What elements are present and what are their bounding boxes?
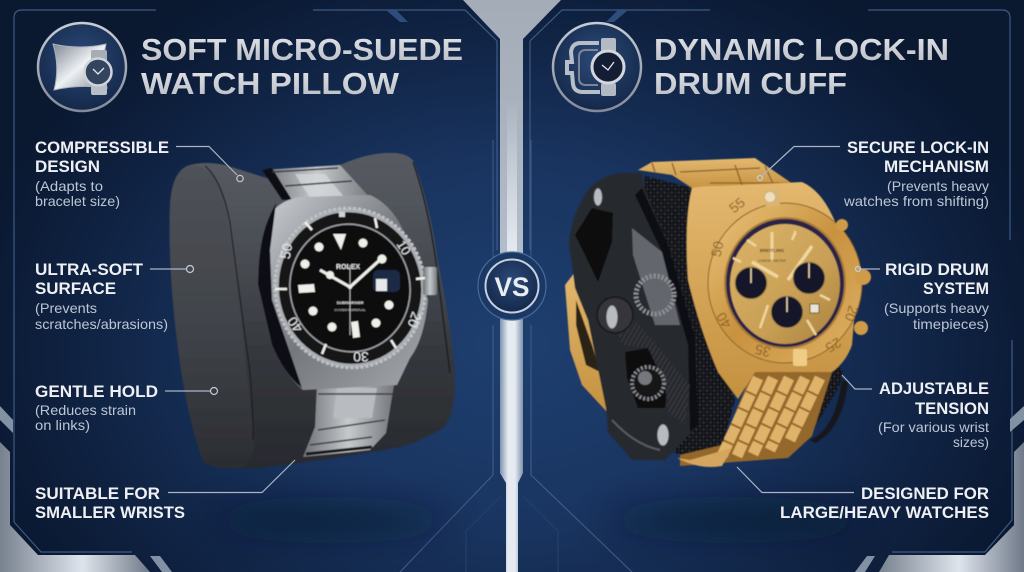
callout: ultra-soft surface: (Prevents [35,300,97,316]
gold watch text [708,194,862,361]
pillow cushion [170,153,455,468]
icon: pillow and watch badge [38,23,126,111]
callout: compressible design: DESIGN [35,157,100,176]
drum cuff with gold watch [565,158,871,467]
VS badge [478,252,546,320]
callout: adjustable tension: sizes) [953,434,989,450]
steel case [258,195,428,390]
mechanism gears [597,276,674,399]
gold watch text: 55 [726,194,748,216]
callout: adjustable tension: (For various wrist [878,419,989,435]
dial and bezel text: OYSTER PERPETUAL [334,308,366,312]
floor shadow right [605,508,865,532]
gold watch text: CHRONOMETER [758,259,786,263]
callout: ultra-soft surface: ULTRA-SOFT [35,260,144,279]
bezel and dial [260,194,440,382]
callout: gentle hold: GENTLE HOLD [35,382,158,401]
heading: soft micro-suede watch pillow [141,32,463,101]
callout: rigid drum system: SYSTEM [923,279,989,298]
callout: ultra-soft surface: SURFACE [35,279,116,298]
case shadow [258,203,302,388]
mechanism screws [594,188,669,446]
subdials [735,262,825,328]
gold watch text: 20 [842,304,862,324]
dial and bezel text: SUBMARINER [336,300,364,305]
corner metal: bottom right [855,406,1024,572]
dial and bezel text: ROLEX [336,264,360,271]
gold watch text: BREITLING [760,248,785,253]
black mechanism plate [569,173,698,460]
callout: adjustable tension [842,375,989,450]
callout: designed for large/heavy watches [737,467,989,522]
heading: dynamic lock-in drum cuff: DRUM CUFF [654,66,847,101]
suede pillow with steel watch [170,153,455,468]
lower steel bracelet [303,385,394,457]
heading: soft micro-suede watch pillow: SOFT MICRO-SUEDE [141,32,463,67]
callout: rigid drum system [856,260,989,332]
callout: ultra-soft surface: scratches/abrasions) [35,316,168,332]
gold pushers and crown [836,219,871,335]
callout: adjustable tension: TENSION [915,399,989,418]
corner metal: bottom left [0,406,172,572]
dial and bezel text: 30 [353,349,369,365]
callout: designed for large/heavy watches: LARGE/HEAVY WATCHES [780,503,989,522]
dial and bezel text: 10 [394,238,414,258]
gold dial hands and hour markers [733,231,830,335]
callout: compressible design: (Adapts to [35,178,103,194]
heading: dynamic lock-in drum cuff [654,32,949,101]
callout: rigid drum system: timepieces) [913,316,989,332]
callout: compressible design: COMPRESSIBLE [35,138,169,157]
gold watch text: 25 [823,335,844,356]
center metallic spine [463,0,561,572]
subdial hands [751,263,809,312]
floor shadow left [210,508,450,532]
gold bezel and dial [708,190,862,366]
callout: gentle hold: on links) [35,417,90,433]
left panel frame [14,10,500,572]
callout: designed for large/heavy watches: DESIGNED FOR [861,484,989,503]
callout: gentle hold [35,382,218,433]
callout: rigid drum system: (Supports heavy [884,300,989,316]
carbon drum [640,176,848,456]
icon: drum cuff and watch badge [553,23,641,111]
dial and bezel text: 20 [404,310,425,330]
gold watch text: 35 [753,341,772,361]
date window [373,270,400,292]
dial markers [275,211,425,354]
callout: gentle hold: (Reduces strain [35,402,136,418]
date window gold [810,304,819,313]
heading: dynamic lock-in drum cuff: DYNAMIC LOCK-IN [654,32,949,67]
heading: soft micro-suede watch pillow: WATCH PILLOW [141,66,400,101]
callout: suitable for smaller wrists [35,460,295,522]
dial and bezel text: 50 [277,242,295,260]
callout: adjustable tension: ADJUSTABLE [879,379,989,398]
right panel frame [524,10,1012,572]
callout: compressible design [35,138,243,209]
callout: suitable for smaller wrists: SUITABLE FOR [35,484,160,503]
upper steel bracelet [262,165,372,200]
callout: ultra-soft surface [35,260,194,332]
gold side clip [565,272,618,412]
callout: suitable for smaller wrists: SMALLER WRISTS [35,503,185,522]
callout: secure lock-in mechanism [758,138,989,209]
gold watch text: 40 [713,310,734,331]
VS badge: VS [494,272,530,302]
callout: rigid drum system: RIGID DRUM [885,260,989,279]
gold watch text: 50 [708,239,727,258]
dial and bezel text [277,238,425,365]
callout: secure lock-in mechanism: (Prevents heavy [887,178,989,194]
callout: secure lock-in mechanism: SECURE LOCK-IN [847,138,989,157]
callout: secure lock-in mechanism: watches from shifting) [843,193,989,209]
gold case [687,182,858,399]
upper gold bracelet [638,158,800,190]
crown [423,267,437,295]
callout: compressible design: bracelet size) [35,193,120,209]
callout: secure lock-in mechanism: MECHANISM [884,157,989,176]
lower gold bracelet [677,372,832,467]
dial and bezel text: 40 [284,314,306,336]
